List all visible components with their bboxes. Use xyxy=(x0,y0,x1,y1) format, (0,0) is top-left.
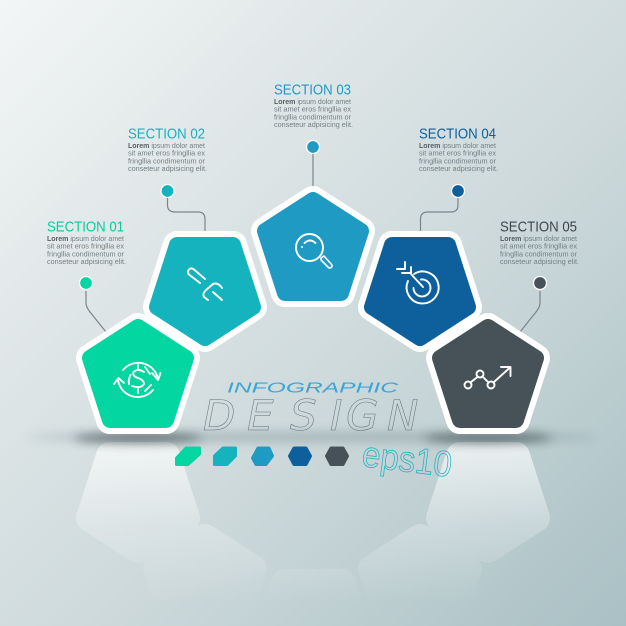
icon: target with arrow xyxy=(397,262,439,303)
text block: section 01: fringllia condimentum or xyxy=(47,249,125,258)
marker dot 2 xyxy=(161,184,174,198)
text block: section 02: SECTION 02 xyxy=(128,126,205,142)
colour swatches xyxy=(176,448,348,464)
panel: section 04 pentagon xyxy=(372,245,468,338)
panel: section 05 pentagon xyxy=(440,327,536,420)
text block: section 04: conseteur adpisicing elit. xyxy=(419,164,498,173)
text block: section 04 xyxy=(419,126,498,173)
reflection of the pentagon arc xyxy=(76,442,550,567)
text block: section 02: conseteur adpisicing elit. xyxy=(128,164,207,173)
label: eps10: eps10 xyxy=(360,433,454,485)
text block: section 05: sit amet eros fringllia ex xyxy=(500,242,577,250)
text block: section 04: Lorem ipsum dolor amet xyxy=(419,141,496,150)
text block: section 01 xyxy=(47,218,126,266)
marker dot 3 xyxy=(306,140,320,154)
text block: section 05: fringllia condimentum or xyxy=(500,249,578,258)
text block: section 03: Lorem ipsum dolor amet xyxy=(274,97,351,106)
icon: dollar with circular arrows xyxy=(114,363,160,397)
text block: section 05: SECTION 05 xyxy=(500,218,577,236)
icon: broken link xyxy=(188,268,222,300)
icon: magnifier xyxy=(296,234,332,268)
text block: section 05 xyxy=(500,218,579,266)
text block: section 02: sit amet eros fringllia ex xyxy=(128,148,205,158)
icon: trend line xyxy=(464,367,510,388)
text block: section 01: Lorem ipsum dolor amet xyxy=(47,234,124,243)
heading: infographic: INFOGRAPHIC xyxy=(227,380,399,396)
text block: section 04: fringllia condimentum or xyxy=(419,156,497,165)
text block: section 05: Lorem ipsum dolor amet xyxy=(500,234,577,243)
marker dot 5 xyxy=(534,276,546,290)
text block: section 03: conseteur adpisicing elit. xyxy=(274,120,353,129)
text block: section 02 xyxy=(128,126,207,173)
text block: section 04: sit amet eros fringllia ex xyxy=(419,148,496,158)
panel: section 03 pentagon xyxy=(265,200,361,293)
text block: section 02: fringllia condimentum or xyxy=(128,156,206,165)
text block: section 03: SECTION 03 xyxy=(274,82,351,98)
text block: section 03 xyxy=(274,82,353,129)
text block: section 01: sit amet eros fringllia ex xyxy=(47,242,124,250)
text block: section 02: Lorem ipsum dolor amet xyxy=(128,141,205,150)
marker dot 4 xyxy=(452,184,464,198)
connector lines xyxy=(86,154,540,332)
text block: section 03: sit amet eros fringllia ex xyxy=(274,104,351,114)
panel: section 01 pentagon xyxy=(90,327,186,420)
marker dot 1 xyxy=(80,276,92,290)
heading: design: DESIGN xyxy=(203,391,418,440)
text block: section 04: SECTION 04 xyxy=(419,126,496,142)
text block: section 05: conseteur adpisicing elit. xyxy=(500,257,579,266)
text block: section 03: fringllia condimentum or xyxy=(274,112,352,121)
text block: section 01: conseteur adpisicing elit. xyxy=(47,257,126,266)
text block: section 01: SECTION 01 xyxy=(47,218,124,236)
panel: section 02 pentagon xyxy=(157,245,253,338)
ground shadow xyxy=(28,432,598,443)
